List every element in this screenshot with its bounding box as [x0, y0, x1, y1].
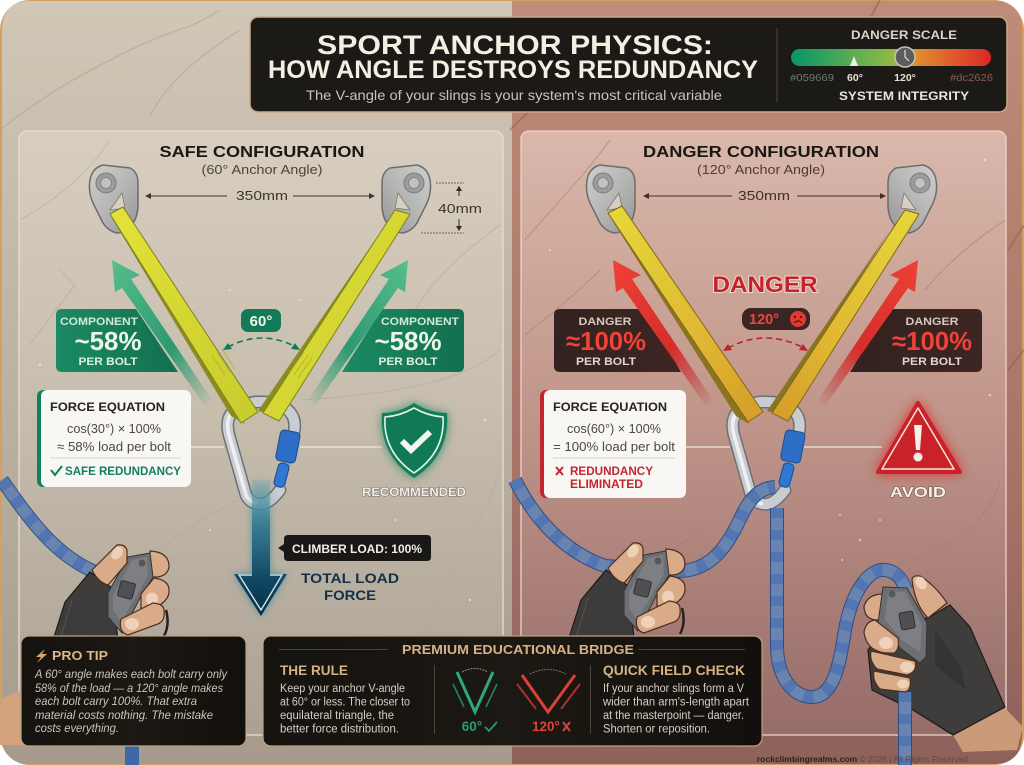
danger box right — [850, 309, 982, 372]
angle pill 60 degrees: 60° — [250, 313, 272, 330]
column: quick field check — [602, 663, 750, 736]
bridge heading: PREMIUM EDUCATIONAL BRIDGE — [402, 642, 634, 657]
danger box right: PER BOLT — [902, 356, 962, 368]
hand: right belay — [864, 574, 1023, 765]
heading: danger configuration: DANGER CONFIGURATION — [643, 144, 879, 161]
force equation box — [37, 390, 191, 487]
pro tip body: costs everything. — [35, 723, 119, 735]
label: total load force: FORCE — [324, 587, 376, 603]
column: quick field check: If your anchor slings form a V — [603, 683, 744, 695]
force equation box: ELIMINATED — [570, 479, 643, 491]
component box left — [56, 309, 178, 372]
arrow: right bolt force — [818, 260, 918, 406]
icon: red 120 degree V: 120° — [532, 719, 560, 734]
danger box left: PER BOLT — [576, 356, 636, 368]
force equation box: cos(30°) × 100% — [67, 421, 161, 436]
icon: left bolt hanger — [586, 165, 635, 233]
force equation box: FORCE EQUATION — [553, 400, 667, 414]
dimension: 350mm — [643, 188, 886, 203]
sling left — [110, 207, 258, 424]
angle arc — [223, 338, 300, 350]
component box right: ~58% — [374, 326, 442, 356]
sling right — [767, 210, 919, 421]
rope and hands: danger side — [515, 480, 1023, 765]
panel: safe configuration — [19, 131, 503, 735]
callout: climber load: CLIMBER LOAD: 100% — [292, 544, 422, 556]
icon: warning triangle — [878, 403, 960, 472]
component box right: PER BOLT — [378, 356, 438, 368]
danger scale gauge — [790, 30, 993, 103]
rope: brake strand — [777, 508, 906, 697]
angle arc — [723, 338, 808, 351]
icon: green shield — [382, 403, 447, 478]
hand: left belay — [569, 542, 685, 638]
callout: climber load — [278, 535, 431, 561]
heading: pro tip: PRO TIP — [52, 648, 108, 663]
icon: left bolt hanger — [89, 165, 138, 233]
danger scale gauge: #dc2626 — [950, 72, 993, 84]
carabiner — [733, 402, 806, 504]
angle pill 60 degrees — [241, 309, 281, 332]
danger scale gauge: 60° — [847, 72, 863, 84]
pro tip body: 58% of the load — a 120° angle makes — [35, 683, 223, 695]
subtitle: The V-angle of your slings is your system's most critical variable — [306, 87, 722, 103]
title line one: SPORT ANCHOR PHYSICS: — [317, 30, 713, 60]
carabiner — [228, 402, 301, 504]
subheading: 60 degree angle: (60° Anchor Angle) — [202, 162, 322, 177]
component box right — [342, 309, 464, 372]
subheading: 120 degree angle: (120° Anchor Angle) — [697, 162, 825, 177]
connector lines — [191, 446, 382, 448]
angle pill 120 degrees — [742, 308, 810, 330]
force equation box: ≈ 58% load per bolt — [57, 439, 171, 454]
arrow: right bolt force — [308, 260, 408, 406]
arrow: left bolt force — [613, 260, 713, 406]
arrow: left bolt force — [112, 260, 212, 406]
dimension: 350mm — [145, 188, 375, 203]
danger box right: DANGER — [906, 316, 959, 328]
danger scale gauge: DANGER SCALE — [851, 30, 957, 42]
panel: pro tip — [21, 636, 246, 746]
force equation box: = 100% load per bolt — [553, 439, 675, 454]
danger scale gauge: 120° — [894, 72, 916, 84]
dimension: 40mm — [421, 183, 482, 233]
angle pill 120 degrees: 120° — [749, 312, 779, 328]
sling right — [258, 210, 410, 421]
panel: educational bridge — [263, 636, 762, 746]
sling left — [608, 206, 763, 424]
component box left: ~58% — [74, 326, 142, 356]
danger box right: ≈100% — [892, 326, 972, 356]
dimension: 350mm: 350mm — [236, 188, 288, 203]
column: the rule: at 60° or less. The closer to — [280, 696, 410, 708]
panel: title banner — [250, 17, 1007, 112]
column: the rule: equilateral triangle, the — [280, 710, 394, 722]
icon: lightning — [36, 649, 47, 663]
force equation box: SAFE REDUNDANCY — [65, 466, 181, 478]
component box right: COMPONENT — [381, 316, 459, 328]
column: quick field check: at the masterpoint — danger. — [603, 710, 744, 722]
icon: right bolt hanger — [888, 165, 937, 233]
title line two: HOW ANGLE DESTROYS REDUNDANCY — [268, 56, 758, 84]
arrow: total load force — [234, 480, 287, 616]
label: total load force: TOTAL LOAD — [301, 570, 399, 586]
heading: safe configuration: SAFE CONFIGURATION — [160, 144, 364, 161]
pro tip body: each bolt carry 100%. That extra — [35, 696, 197, 708]
footer credit: rockclimbingrealms.com © 2026 | All Rights Reserved — [757, 754, 968, 764]
dimension: 350mm: 350mm — [738, 188, 790, 203]
column: the rule: THE RULE — [280, 663, 348, 678]
force equation box: REDUNDANCY — [570, 466, 653, 478]
column: the rule: better force distribution. — [280, 724, 399, 736]
label: danger warning: DANGER — [712, 272, 818, 297]
danger scale gauge: #059669 — [790, 72, 834, 84]
label: total load force — [301, 570, 399, 603]
dimension: 40mm: 40mm — [438, 201, 482, 216]
column: quick field check: QUICK FIELD CHECK — [603, 663, 745, 678]
force equation box — [540, 390, 686, 498]
label: recommended: RECOMMENDED — [362, 485, 466, 499]
icon: green 60 degree V — [453, 668, 497, 734]
pro tip body — [34, 669, 228, 735]
danger box left: DANGER — [578, 316, 632, 328]
label: avoid: AVOID — [890, 484, 946, 501]
danger scale gauge: SYSTEM INTEGRITY — [839, 89, 969, 103]
danger box left — [554, 309, 681, 372]
pro tip body: material costs nothing. The mistake — [35, 710, 213, 722]
rope: climber strand — [515, 480, 775, 571]
icon: green 60 degree V: 60° — [462, 719, 482, 734]
component box left: COMPONENT — [60, 316, 138, 328]
icon: right bolt hanger — [382, 165, 431, 233]
column: the rule — [280, 663, 410, 736]
column: quick field check: Shorten or reposition. — [603, 724, 710, 736]
force equation box: cos(60°) × 100% — [567, 421, 661, 436]
column: quick field check: wider than arm's-length apart — [602, 696, 750, 708]
column: the rule: Keep your anchor V-angle — [280, 683, 405, 695]
connector lines — [686, 446, 882, 448]
panel: danger configuration — [521, 131, 1006, 735]
rope and hand: safe side — [0, 480, 169, 765]
danger box left: ≈100% — [566, 326, 646, 356]
force equation box: FORCE EQUATION — [50, 400, 165, 414]
icon: red 120 degree V — [517, 670, 580, 734]
component box left: PER BOLT — [78, 356, 138, 368]
pro tip body: A 60° angle makes each bolt carry only — [34, 669, 228, 681]
